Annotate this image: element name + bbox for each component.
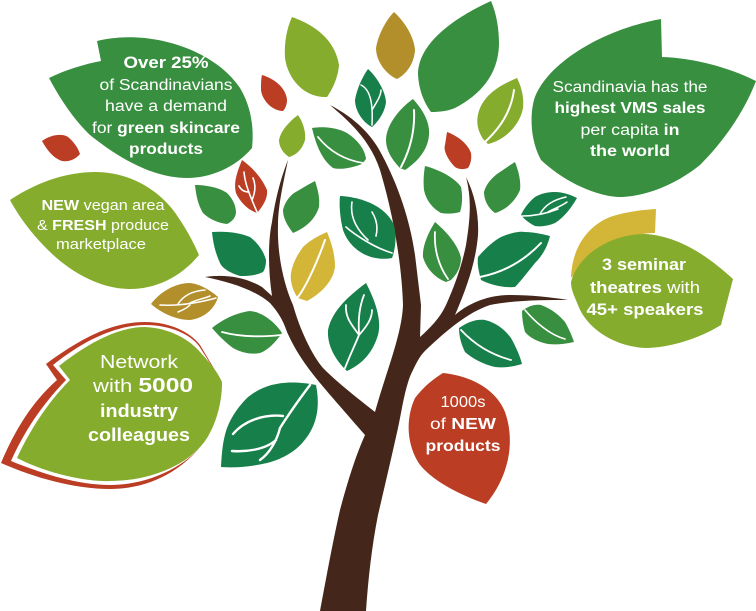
- leaf: small red top: [261, 75, 287, 111]
- callout: network leaf: with 5000: [92, 375, 193, 397]
- leaf: green left 3: [283, 181, 319, 233]
- leaf: red centre right: [445, 132, 471, 169]
- leaf: green lower right 1: [459, 320, 522, 367]
- leaf: top green: [418, 1, 499, 112]
- leaf: green right 2: [484, 162, 520, 213]
- callout: seminar leaf: [571, 209, 733, 348]
- leaf: small red left: [42, 135, 80, 161]
- leaf: green left 2: [212, 232, 266, 276]
- callout: VMS sales leaf: Scandinavia has the: [552, 79, 708, 96]
- tree trunk and branches: [205, 105, 568, 611]
- callout: Over 25% leaf: Over 25%: [124, 54, 209, 72]
- leaf: yellow centre: [291, 232, 335, 301]
- leaf: veined green centre: [340, 196, 395, 259]
- callout: seminar leaf: 3 seminar: [602, 256, 687, 274]
- callout: new products leaf: 1000s: [440, 394, 486, 411]
- leaf: veined small right: [521, 192, 577, 226]
- leaf: green lower right 2: [522, 305, 574, 344]
- callout: Over 25% leaf: of Scandinavians: [100, 77, 233, 94]
- leaf: red veined: [235, 160, 267, 213]
- callout: network leaf: industry: [100, 401, 178, 421]
- callout: vegan area leaf: NEW vegan area: [42, 198, 166, 214]
- leaf: green centre: [386, 99, 429, 170]
- callout: VMS sales leaf: the world: [590, 143, 670, 160]
- callout: VMS sales leaf: per capita in: [580, 122, 680, 139]
- callout: new products leaf: [409, 373, 510, 504]
- callout: Over 25% leaf: for green skincare: [92, 120, 240, 137]
- callout: Over 25% leaf: [49, 37, 253, 178]
- callout: seminar leaf: theatres with: [590, 279, 700, 297]
- callout: new products leaf: of NEW: [430, 416, 496, 433]
- leaf: olive small centre-left: [279, 115, 305, 157]
- callout: vegan area leaf: [10, 172, 199, 289]
- callout: VMS sales leaf: highest VMS sales: [554, 100, 706, 117]
- callout: network leaf: [1, 322, 222, 489]
- leaf: large green right: [478, 232, 550, 287]
- callout: Over 25% leaf: products: [129, 141, 203, 158]
- leaf: green right 1: [424, 166, 462, 214]
- callout: network leaf: Network: [100, 352, 179, 372]
- leaf: olive right of trunk: [477, 78, 523, 144]
- callout: network leaf: colleagues: [88, 425, 190, 445]
- leaf: top olive: [285, 17, 339, 97]
- callout: Over 25% leaf: have a demand: [105, 98, 227, 115]
- leaf: veined green centre low: [328, 283, 379, 371]
- leaf: green veined middle: [423, 222, 461, 282]
- callout: VMS sales leaf: [532, 19, 756, 197]
- leaf: top gold: [376, 12, 415, 79]
- leaf: veined green top centre: [355, 69, 386, 127]
- leaf: gold veined: [151, 283, 218, 320]
- leaf: green left 1: [195, 185, 236, 224]
- callout: vegan area leaf: marketplace: [56, 237, 146, 253]
- leaf: veined green lower left: [212, 311, 282, 354]
- callout: seminar leaf: 45+ speakers: [586, 301, 704, 319]
- callout: new products leaf: products: [426, 438, 500, 455]
- callout: vegan area leaf: & FRESH produce: [37, 218, 169, 234]
- leaf: green left of trunk: [312, 127, 366, 169]
- leaf: large veined lower: [221, 383, 318, 467]
